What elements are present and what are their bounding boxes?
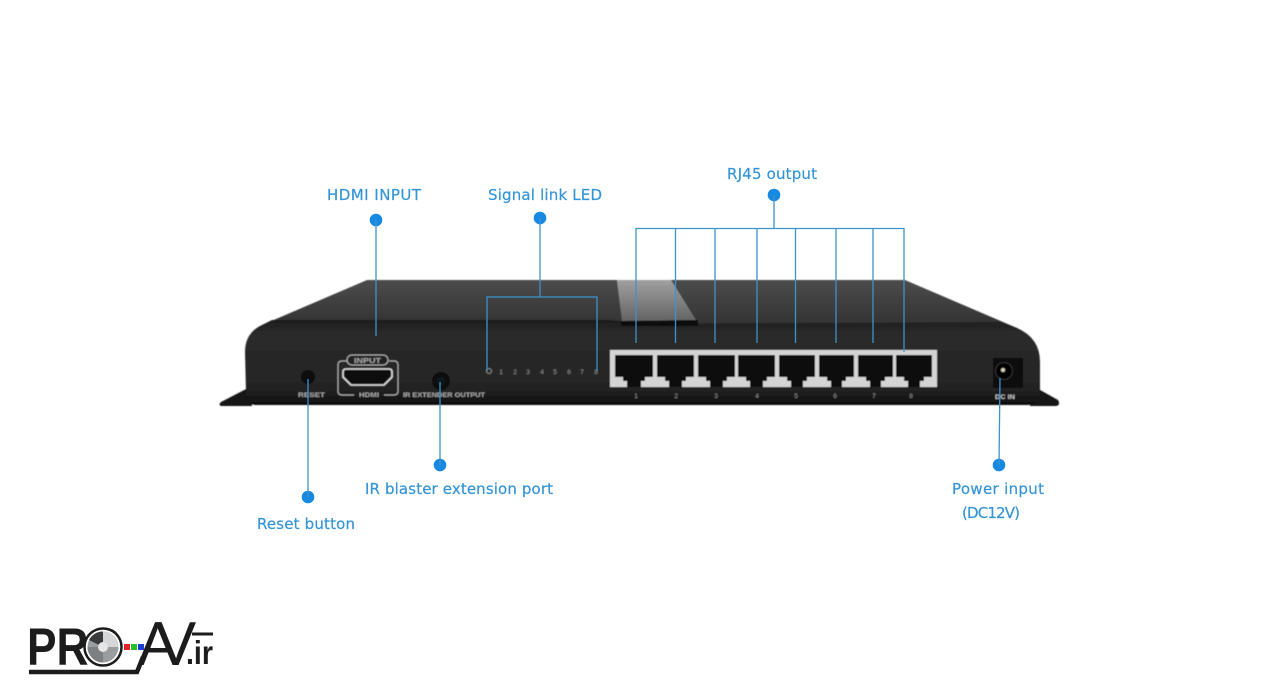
front face bbox=[245, 320, 1040, 405]
logo RGB dots bbox=[124, 644, 144, 650]
callout: HDMI INPUT bbox=[327, 186, 422, 336]
logo wordmark AV: AV bbox=[138, 610, 197, 679]
callout: Power input (DC12V): Power input bbox=[952, 480, 1044, 498]
RJ45 port numbers: 1 bbox=[634, 393, 638, 400]
callout: Power input (DC12V) bbox=[952, 378, 1044, 522]
callout: Signal link LED: Signal link LED bbox=[488, 186, 602, 204]
RJ45 port numbers: 2 bbox=[674, 393, 678, 400]
signal link LEDs: 5 bbox=[553, 369, 557, 376]
DC power jack: DC IN bbox=[995, 394, 1015, 401]
reset button bbox=[298, 370, 325, 399]
device: rear panel of splitter bbox=[220, 280, 1059, 406]
callout: IR blaster extension port: IR blaster extension port bbox=[365, 480, 553, 498]
logo wordmark .ir: .ir bbox=[186, 634, 213, 671]
HDMI input port: HDMI bbox=[359, 392, 379, 399]
callout: RJ45 output bbox=[636, 165, 904, 352]
logo wordmark PRO: PRO bbox=[27, 618, 123, 677]
logo top-right bar bbox=[192, 632, 213, 636]
RJ45 port block bbox=[610, 350, 937, 387]
logo aperture icon bbox=[84, 628, 122, 666]
signal link LEDs: 2 bbox=[513, 369, 517, 376]
signal link LEDs: 4 bbox=[540, 369, 544, 376]
RJ45 port numbers bbox=[634, 393, 913, 400]
IR extender output jack bbox=[403, 372, 485, 399]
RJ45 port numbers: 6 bbox=[833, 393, 837, 400]
RJ45 port numbers: 3 bbox=[714, 393, 718, 400]
callout: Reset button: Reset button bbox=[257, 515, 355, 533]
HDMI input port: INPUT bbox=[354, 356, 382, 365]
HDMI input port bbox=[338, 355, 398, 399]
callout: Power input (DC12V): (DC12V) bbox=[962, 504, 1020, 522]
DC power jack bbox=[993, 358, 1023, 401]
signal link LEDs: 7 bbox=[580, 369, 584, 376]
sticker shadow bbox=[620, 320, 698, 326]
signal link LEDs: 8 bbox=[594, 369, 598, 376]
callout: Reset button bbox=[257, 379, 355, 533]
RJ45 port numbers: 4 bbox=[755, 393, 759, 400]
signal link LEDs bbox=[486, 368, 598, 376]
signal link LEDs: 3 bbox=[526, 369, 530, 376]
reset button: RESET bbox=[298, 392, 325, 399]
signal link LEDs: 1 bbox=[499, 369, 503, 376]
callout: IR blaster extension port bbox=[365, 382, 553, 498]
RJ45 port numbers: 5 bbox=[794, 393, 798, 400]
RJ45 port numbers: 7 bbox=[872, 393, 876, 400]
mounting flanges bbox=[220, 386, 1059, 406]
signal link LEDs: 6 bbox=[567, 369, 571, 376]
logo underline swoosh bbox=[29, 657, 143, 672]
RJ45 port numbers: 8 bbox=[909, 393, 913, 400]
callout: HDMI INPUT: HDMI INPUT bbox=[327, 186, 422, 204]
callout: Signal link LED bbox=[487, 186, 602, 371]
top cover bbox=[250, 280, 1030, 345]
label sticker bbox=[617, 280, 696, 321]
IR extender output jack: IR EXTENDER OUTPUT bbox=[403, 392, 485, 399]
logo: PRO-AV.ir bbox=[27, 610, 213, 679]
callout: RJ45 output: RJ45 output bbox=[727, 165, 817, 183]
